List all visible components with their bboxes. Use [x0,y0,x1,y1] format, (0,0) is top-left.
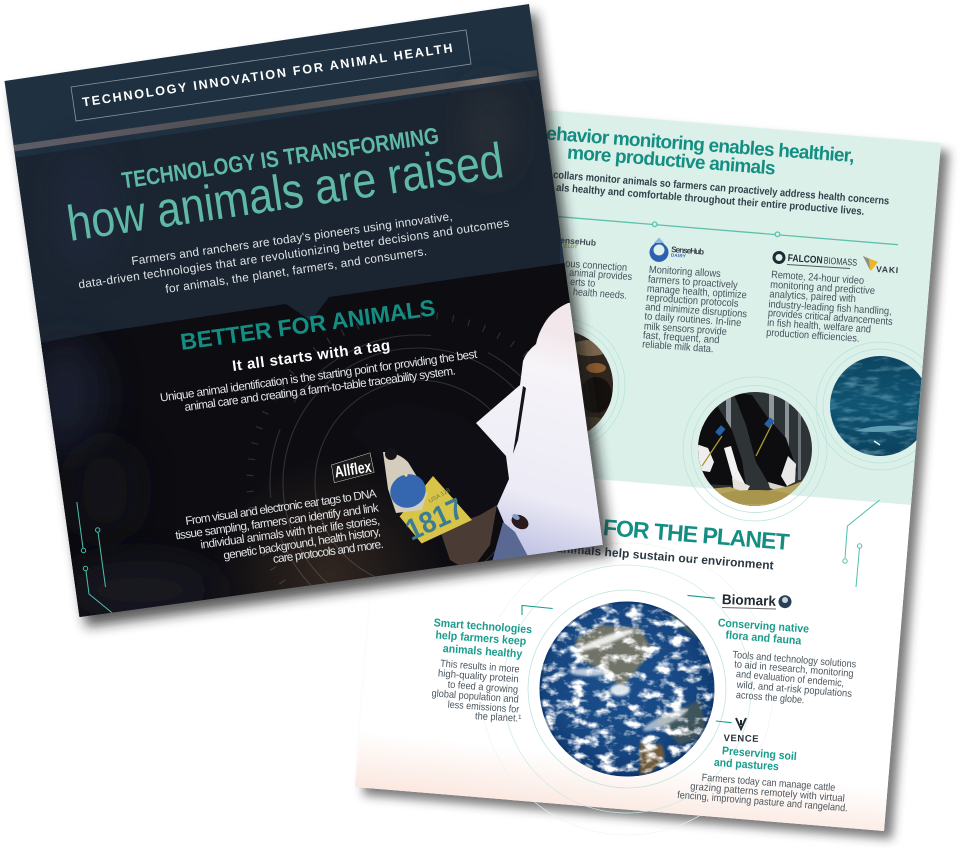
callout: conserving native flora and fauna: Tools and technology solutions [732,650,857,671]
logo: Allflex [331,453,375,483]
text: dairy column: to daily routines. In-line [644,311,742,329]
intro paragraph: for animals, the planet, farmers, and consumers. [164,244,428,296]
text: feedlot column: health needs. [572,287,627,302]
text: dairy column: reliable milk data. [642,339,714,355]
logo: SenseHub dairy: SenseHub [671,245,704,257]
callout: conserving native flora and fauna: wild, and at-risk populations [735,680,852,700]
monitoring heading: more productive animals [566,143,776,180]
ear tag paragraph: genetic background, health history, [222,524,382,562]
ear tag paragraph [174,486,384,566]
ear tag paragraph: tissue sampling, farmers can identify and link [174,500,380,542]
logos: Falcon Biomass and Vaki: VAKI [876,264,898,275]
photo: black and white cow with ear tag [442,302,603,565]
callout: preserving soil and pastures: and pastures [713,757,779,773]
tag paragraph: animal care and creating a farm-to-table traceability system. [184,363,456,414]
callout: smart technologies: help farmers keep [435,630,527,648]
divider line with nodes [530,214,898,245]
logo: Allflex: Allflex [333,459,373,481]
callout: conserving native flora and fauna: flora and fauna [725,630,802,647]
logos: Falcon Biomass and Vaki [774,252,898,275]
text: feedlot column: animal provides [569,268,632,283]
circuit lines: left [77,502,116,616]
ear tag paragraph: individual animals with their life stories, [200,513,381,552]
text: aquaculture column: monitoring and predictive [770,280,875,297]
text: dairy column: reproduction protocols [646,293,739,310]
earth globe with orbit rings [481,543,773,835]
text: dairy column: fast, frequent, and [643,330,720,346]
ear tag 1817 [383,448,472,547]
text: aquaculture column: production efficiencies. [766,328,860,345]
callout: preserving soil and pastures: grazing patterns remotely with virtual [690,781,845,805]
callout: conserving native flora and fauna: to aid in research, monitoring [734,659,854,680]
callout: smart technologies: the planet.¹ [475,711,522,725]
logos: Falcon Biomass and Vaki: BIOMASS [823,256,857,269]
circuit lines: right [843,500,880,587]
monitoring intro text: als healthy and comfortable throughout their entire productive lives. [556,182,865,218]
planet heading: FOR THE PLANET [602,514,791,555]
title box [71,30,471,121]
text: dairy column: milk sensors provide [643,321,727,338]
text: feedlot column: ous connection [565,259,628,274]
main headline: how animals are raised [63,132,507,252]
text: aquaculture column: in fish health, welfare and [767,318,871,336]
monitoring intro text: collars monitor animals so farmers can proactively address health concerns [553,169,890,207]
photo: dairy cows feeding [683,377,827,521]
logo: SenseHub dairy [650,238,704,262]
text: aquaculture column: analytics, paired with [769,289,856,305]
callout: preserving soil and pastures: Farmers today can manage cattle [701,773,836,794]
text: dairy column: Monitoring allows [649,265,721,280]
callout: smart technologies: to feed a growing [447,680,519,696]
back page: behavior monitoring and better for the planet [340,60,960,851]
callout: preserving soil and pastures: fencing, improving pasture and rangeland. [677,790,848,814]
title box: TECHNOLOGY INNOVATION FOR ANIMAL HEALTH [81,41,453,109]
tag scan rings [246,312,528,586]
photo: fish school [816,342,924,470]
callout: smart technologies: animals healthy [442,643,523,661]
callout: preserving soil and pastures: VENCE [723,733,759,745]
logo: SenseHub dairy: DAIRY [671,253,686,259]
intro paragraph: data-driven technologies that are revolutionizing better decisions and outcomes [77,216,510,291]
callout: smart technologies: Smart technologies [433,617,532,636]
better for animals heading: BETTER FOR ANIMALS [179,294,437,355]
ear tag 1817: 1817 [401,492,469,547]
text: aquaculture column: industry-leading fish handling, [768,299,892,318]
tag paragraph: Unique animal identification is the starting point for providing the best [159,347,479,405]
ear tag paragraph: From visual and electronic ear tags to DNA [184,486,378,528]
text: dairy column: farmers to proactively [648,274,739,291]
text: dairy column: manage health, optimize [647,284,747,301]
front page: technology is transforming [0,4,640,651]
planet subheading: animals help sustain our environment [556,541,774,572]
logos: Falcon Biomass and Vaki: FALCON [787,253,823,266]
callout: conserving native flora and fauna: across the globe. [736,690,805,706]
photo: cattle in feedlot (partly hidden) [572,320,626,444]
callout: conserving native flora and fauna: and evaluation of endemic, [736,669,845,689]
logo: SenseHub feedlot: ELOT [564,244,578,251]
text: aquaculture column: Remote, 24-hour video [771,270,865,287]
ear tag 1817: USA 128 [428,487,452,505]
subheading: it all starts with a tag: It all starts with a tag [231,337,391,375]
callout: smart technologies [431,606,553,725]
text: dairy column [642,265,747,355]
logo: SenseHub feedlot: enseHub [560,235,596,248]
callout: smart technologies: global population and [431,688,519,706]
intro paragraph: Farmers and ranchers are today's pioneers using innovative, [130,209,453,268]
text: aquaculture column: provides critical advancements [767,308,893,328]
callout: conserving native flora and fauna [687,591,857,706]
text: dairy column: and minimize disruptions [645,302,747,320]
ear tag paragraph: care protocols and more. [272,537,384,566]
monitoring heading: Behavior monitoring enables healthier, [533,123,855,167]
callout: smart technologies: less emissions for [447,700,520,716]
main headline: TECHNOLOGY IS TRANSFORMING [120,122,440,193]
callout: preserving soil and pastures: Preserving soil [722,745,797,763]
text: feedlot column [565,259,632,302]
text: aquaculture column [766,270,893,345]
callout: smart technologies: high-quality protein [437,668,519,685]
callout: conserving native flora and fauna: Conserving native [717,617,809,636]
callout: smart technologies: This results in more [440,659,520,676]
callout: conserving native flora and fauna: Biomark [722,591,776,609]
callout: preserving soil and pastures [677,718,848,814]
text: feedlot column: erts to [570,277,596,290]
